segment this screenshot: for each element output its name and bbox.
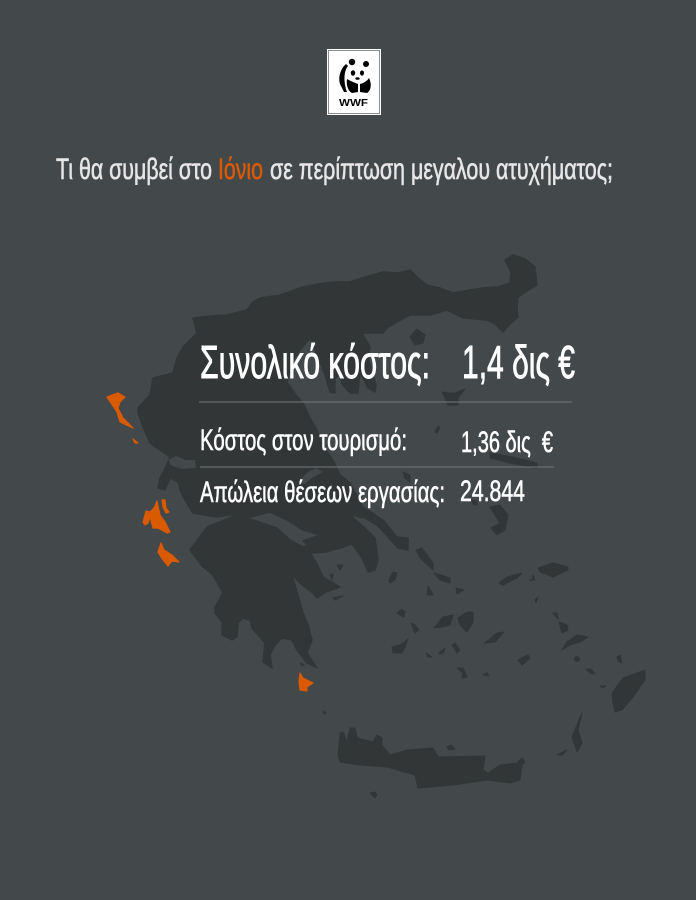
Samos and Ikaria (538, 563, 568, 577)
Kythira (299, 673, 313, 691)
stats panel (199, 336, 575, 509)
Thasos (410, 329, 425, 345)
job losses: 24.844 (460, 475, 525, 508)
map of Greece (107, 255, 645, 798)
Dodecanese (553, 613, 558, 619)
total cost: 1,4 δις € (462, 336, 575, 388)
Skyros (490, 505, 508, 535)
tourism cost: 1,36 δις € (461, 426, 553, 459)
Rhodes (612, 670, 645, 712)
Corfu (107, 393, 133, 428)
Ithaca (162, 500, 169, 513)
total cost: Συνολικό κόστος: (200, 336, 430, 388)
job losses: Απώλεια θέσεων εργασίας: (200, 476, 445, 509)
Ionian islands highlighted in orange (107, 393, 313, 691)
title (56, 153, 613, 186)
tourism cost: Κόστος στον τουρισμό: (200, 424, 407, 457)
Lemnos (442, 389, 465, 405)
Lesbos (490, 453, 537, 468)
WWF logo (327, 49, 381, 115)
highlighted word: Ιόνιο (218, 153, 263, 186)
title: Τι θα συμβεί στο (56, 153, 212, 186)
gulfs (168, 456, 323, 484)
Cyclades (416, 548, 433, 570)
Karpathos and Kasos (572, 713, 582, 752)
mainland (138, 255, 537, 668)
Kefalonia (143, 501, 170, 533)
panda (339, 59, 371, 93)
WWF wordmark: WWF (339, 97, 369, 109)
Gavdos (370, 792, 377, 798)
Saronic islands (337, 565, 343, 570)
Zakynthos (158, 543, 179, 566)
Crete (338, 728, 525, 788)
Paxoi (133, 439, 138, 443)
islands (300, 329, 645, 798)
